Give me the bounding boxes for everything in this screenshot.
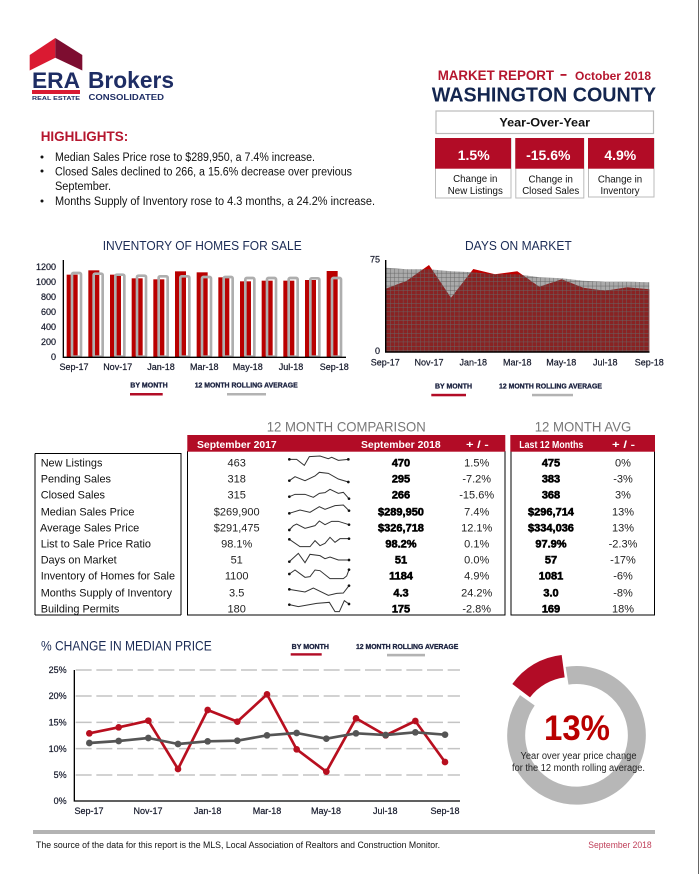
report heading: WASHINGTON COUNTY [432, 84, 656, 107]
line chart: percent change in median price: 10% [49, 744, 67, 754]
column: September 2018 values [378, 457, 424, 615]
bar chart: inventory of homes for sale: May-18 [233, 362, 263, 372]
highlights text block: Months Supply of Inventory rose to 4.3 months, a 24.2% increase. [55, 196, 375, 208]
legend: days on market chart [431, 384, 602, 396]
table panel: metric labels: Pending Sales [41, 473, 111, 485]
line chart: percent change in median price: Nov-17 [133, 806, 163, 816]
column: year-over-year change: 4.9% [464, 570, 489, 582]
highlights text block: Closed Sales declined to 266, a 15.6% decrease over previous [55, 166, 352, 178]
legend: inventory chart: BY MONTH [130, 383, 168, 390]
bar chart: inventory of homes for sale [36, 260, 349, 372]
column: September 2018 values: 1184 [389, 570, 414, 582]
line chart: percent change in median price: 20% [49, 691, 67, 701]
donut chart: 13% rolling average: for the 12 month rolling average. [512, 763, 645, 774]
comparison table header: September 2017 [197, 439, 277, 451]
column: last 12 months values: $296,714 [528, 506, 575, 518]
column: average change: -3% [613, 473, 633, 485]
logo: ERA Brokers Consolidated: ERA [32, 68, 80, 93]
table panel: metric labels: Building Permits [41, 603, 120, 615]
column: September 2017 values: 315 [228, 489, 246, 501]
column: last 12 months values: 57 [545, 554, 557, 566]
column: last 12 months values: 383 [542, 473, 560, 485]
sparklines: 12 month trend per metric [288, 456, 350, 612]
column: September 2018 values: $326,718 [378, 522, 424, 534]
area chart: days on market: May-18 [546, 358, 576, 368]
stat card: inventory [588, 138, 654, 197]
legend: median price chart: 12 MONTH ROLLING AVERAGE [356, 644, 459, 651]
line chart: percent change in median price: 0% [54, 796, 67, 806]
bar chart: inventory of homes for sale: 200 [41, 337, 56, 347]
chart title: inventory of homes for sale: INVENTORY OF HOMES FOR SALE [103, 239, 302, 253]
legend: days on market chart: 12 MONTH ROLLING AVERAGE [499, 384, 602, 391]
table panel: metric labels: List to Sale Price Ratio [41, 538, 151, 550]
bar chart: inventory of homes for sale: Jan-18 [147, 362, 175, 372]
column: year-over-year change: 12.1% [461, 522, 493, 534]
report heading [432, 68, 656, 107]
bar chart: inventory of homes for sale: 600 [41, 307, 56, 317]
table heading: 12 month average: 12 MONTH AVG [535, 419, 631, 435]
column: average change [609, 457, 638, 615]
column: September 2017 values: $269,900 [214, 506, 260, 518]
year-over-year label box [436, 111, 654, 134]
column: last 12 months values [528, 457, 575, 615]
column: last 12 months values: $334,036 [528, 522, 574, 534]
average table header [510, 435, 655, 452]
line chart: percent change in median price: Mar-18 [253, 806, 281, 816]
comparison table header: + / - [466, 439, 489, 451]
column: September 2017 values: 1100 [225, 570, 249, 582]
highlights text block: HIGHLIGHTS: [41, 128, 128, 144]
stat card: new listings: Change in [453, 173, 498, 185]
area chart: days on market [370, 254, 664, 368]
table panel: metric labels: Inventory of Homes for Sale [41, 570, 175, 582]
column: September 2018 values: 266 [392, 489, 410, 501]
column: average change: 0% [615, 457, 631, 469]
column: average change: -2.3% [609, 538, 638, 550]
column: September 2017 values: 98.1% [221, 538, 253, 550]
year-over-year label box: Year-Over-Year [499, 116, 590, 130]
column: last 12 months values: 1081 [539, 570, 563, 582]
bar chart: inventory of homes for sale: 0 [51, 352, 56, 362]
logo: ERA Brokers Consolidated: REAL ESTATE [32, 96, 80, 102]
table panel: metric labels: Average Sales Price [40, 522, 139, 534]
area chart: days on market: Sep-18 [635, 358, 664, 368]
column: September 2018 values: 470 [392, 457, 410, 469]
table panel: metric labels: Days on Market [41, 554, 117, 566]
column: year-over-year change: -7.2% [462, 473, 491, 485]
column: year-over-year change: 24.2% [461, 587, 493, 599]
column: year-over-year change: 0.0% [464, 554, 489, 566]
chart title: percent change in median price: % CHANGE IN MEDIAN PRICE [41, 638, 212, 654]
column: average change: -8% [613, 587, 633, 599]
line chart: percent change in median price: 5% [54, 770, 67, 780]
line chart: percent change in median price: 25% [49, 665, 67, 675]
column: last 12 months values: 368 [542, 489, 560, 501]
donut chart: 13% rolling average: 13% [544, 709, 610, 748]
report heading: MARKET REPORT [438, 68, 555, 83]
donut chart: 13% rolling average [512, 655, 645, 796]
area chart: days on market: Sep-17 [371, 358, 400, 368]
line chart: percent change in median price: Jul-18 [373, 806, 398, 816]
column: last 12 months values: 3.0 [543, 587, 559, 599]
column: September 2017 values: 180 [228, 603, 246, 615]
bar chart: inventory of homes for sale: 1000 [36, 277, 56, 287]
average table header: + / - [612, 439, 636, 451]
column: year-over-year change: -2.8% [462, 603, 491, 615]
column: September 2017 values: 51 [231, 554, 243, 566]
column: average change: 13% [612, 522, 634, 534]
stat card: new listings [435, 138, 511, 198]
area chart: days on market: Nov-17 [414, 358, 444, 368]
highlights text block: Median Sales Price rose to $289,950, a 7.4% increase. [55, 152, 315, 164]
column: average change: 13% [612, 506, 634, 518]
bar chart: inventory of homes for sale: Jul-18 [279, 362, 303, 372]
report heading: October 2018 [575, 69, 651, 83]
column: last 12 months values: 97.9% [535, 538, 567, 550]
highlights text block [40, 128, 375, 208]
bar chart: inventory of homes for sale: Nov-17 [103, 362, 132, 372]
comparison table header [187, 435, 505, 452]
column: year-over-year change: 0.1% [464, 538, 489, 550]
column: average change: -17% [610, 554, 636, 566]
table panel: 12 month average [510, 435, 655, 615]
column: average change: -6% [613, 570, 633, 582]
column: average change: 3% [615, 489, 631, 501]
legend: median price chart [291, 644, 459, 656]
area chart: days on market: Jul-18 [593, 358, 618, 368]
column: year-over-year change: -15.6% [459, 489, 494, 501]
column: last 12 months values: 169 [542, 603, 560, 615]
table panel: metric labels: Median Sales Price [41, 506, 134, 518]
stat card: inventory: Inventory [600, 185, 640, 197]
logo: ERA Brokers Consolidated [30, 38, 174, 102]
column: average change: 18% [612, 603, 634, 615]
line chart: percent change in median price: May-18 [311, 806, 341, 816]
column: year-over-year change: 7.4% [464, 506, 489, 518]
bar chart: inventory of homes for sale: 800 [41, 292, 56, 302]
column: last 12 months values: 475 [542, 457, 560, 469]
logo: ERA Brokers Consolidated: Brokers [88, 67, 174, 93]
column: September 2017 values: 318 [228, 473, 246, 485]
donut chart: 13% rolling average: Year over year price change [520, 751, 637, 762]
bar chart: inventory of homes for sale: Mar-18 [190, 362, 219, 372]
bar chart: inventory of homes for sale: Sep-18 [320, 362, 349, 372]
area chart: days on market: 0 [375, 346, 380, 356]
average table header: Last 12 Months [519, 439, 583, 451]
column: September 2018 values: 98.2% [385, 538, 417, 550]
legend: inventory chart: 12 MONTH ROLLING AVERAGE [195, 383, 298, 390]
area chart: days on market: 75 [370, 254, 380, 264]
column: year-over-year change [459, 457, 494, 615]
footer: September 2018 [588, 840, 652, 851]
stat card: closed sales [515, 138, 584, 198]
footer [33, 830, 655, 851]
column: September 2018 values: 4.3 [393, 587, 409, 599]
bar chart: inventory of homes for sale: 1200 [36, 262, 56, 272]
bar chart: inventory of homes for sale: Sep-17 [59, 362, 89, 372]
line chart: percent change in median price [49, 665, 460, 816]
table panel: metric labels: Months Supply of Inventory [41, 587, 172, 599]
stat card: closed sales: Closed Sales [522, 185, 579, 197]
bar chart: inventory of homes for sale: 400 [41, 322, 56, 332]
stat card: inventory: Change in [598, 174, 642, 186]
stat card: closed sales: Change in [529, 174, 573, 186]
table panel: 12 month comparison [187, 435, 505, 615]
comparison table header: September 2018 [361, 439, 441, 451]
column: September 2018 values: 51 [395, 554, 407, 566]
legend: inventory chart [130, 383, 298, 396]
column: September 2017 values: $291,475 [214, 522, 260, 534]
logo: ERA Brokers Consolidated: CONSOLIDATED [88, 92, 164, 102]
column: September 2017 values: 3.5 [229, 587, 244, 599]
area chart: days on market: Mar-18 [503, 358, 532, 368]
legend: days on market chart: BY MONTH [435, 384, 472, 391]
line chart: percent change in median price: 15% [49, 718, 67, 728]
column: September 2017 values: 463 [228, 457, 246, 469]
line chart: percent change in median price: Sep-17 [74, 806, 104, 816]
footer: The source of the data for this report is the MLS, Local Association of Realtors and Construction Monitor. [36, 840, 440, 850]
table panel: metric labels: New Listings [41, 457, 103, 469]
column: September 2017 values [214, 457, 260, 615]
column: year-over-year change: 1.5% [464, 457, 489, 469]
column: September 2018 values: 175 [392, 603, 410, 615]
highlights text block: September. [55, 181, 111, 193]
column: September 2018 values: $289,950 [378, 506, 424, 518]
chart title: days on market: DAYS ON MARKET [465, 239, 572, 253]
area chart: days on market: Jan-18 [460, 358, 487, 368]
stat card: closed sales: -15.6% [526, 147, 571, 163]
stat card: new listings: 1.5% [458, 147, 490, 163]
table panel: metric labels: Closed Sales [41, 489, 105, 501]
legend: median price chart: BY MONTH [292, 644, 329, 651]
line chart: percent change in median price: Jan-18 [194, 806, 221, 816]
stat card: inventory: 4.9% [604, 147, 637, 163]
table panel: metric labels [35, 454, 181, 615]
table heading: 12 month comparison: 12 MONTH COMPARISON [267, 419, 426, 435]
stat card: new listings: New Listings [448, 185, 503, 197]
column: September 2018 values: 295 [392, 473, 410, 485]
line chart: percent change in median price: Sep-18 [430, 806, 460, 816]
